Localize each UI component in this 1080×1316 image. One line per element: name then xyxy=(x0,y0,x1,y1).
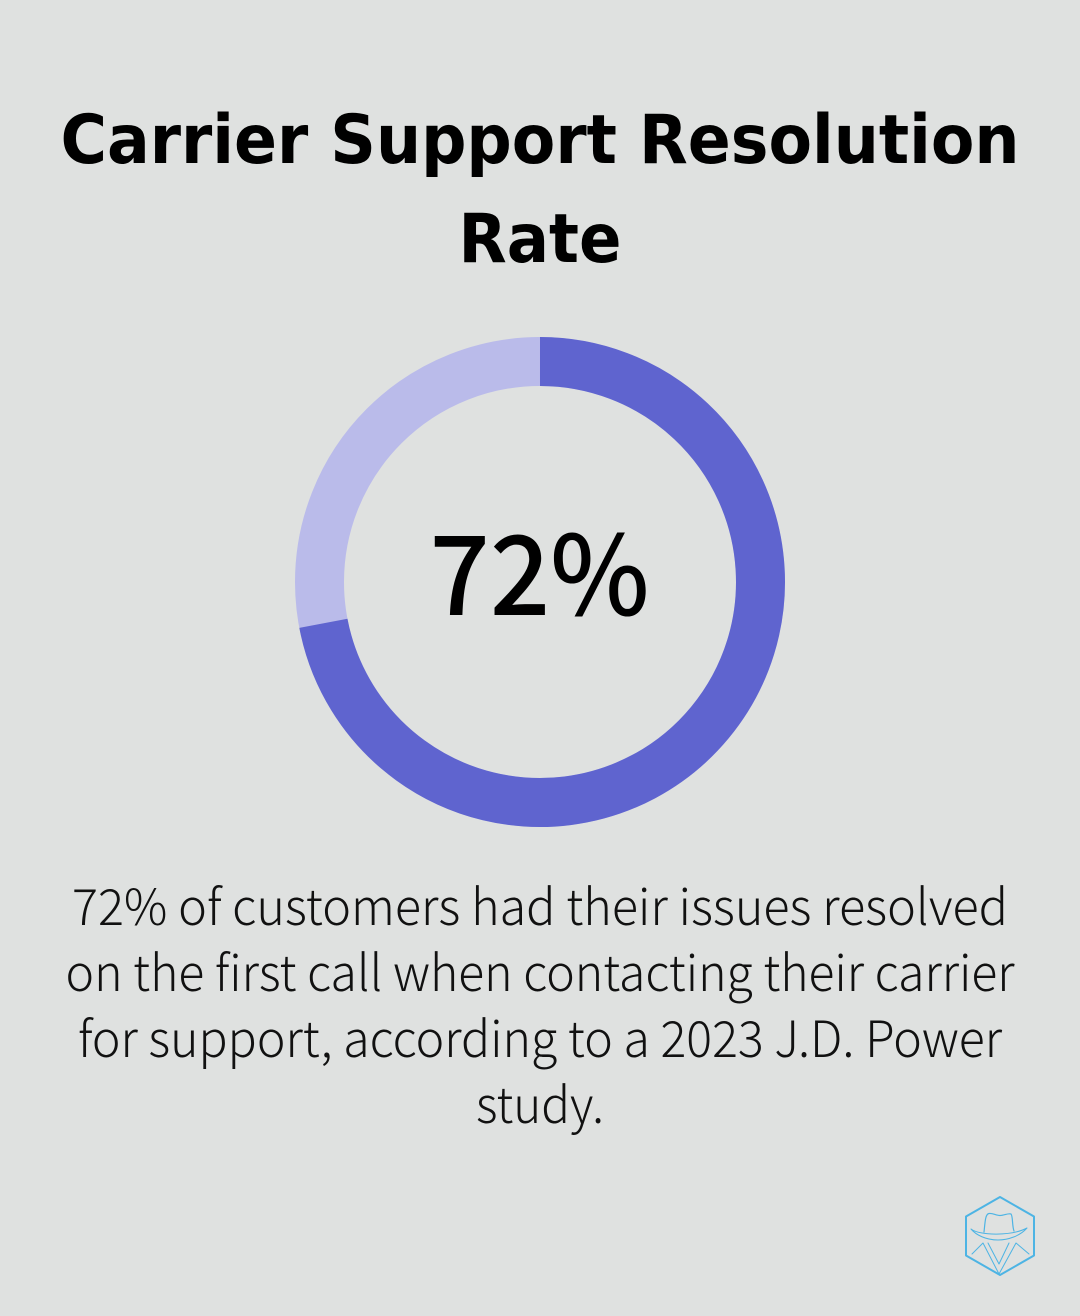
title: Carrier Support Resolution xyxy=(60,101,1020,180)
description text: study. xyxy=(476,1066,604,1138)
title xyxy=(60,101,1020,279)
description text: for support, according to a 2023 J.D. Power xyxy=(78,1000,1003,1072)
icon: spy hat logo xyxy=(966,1197,1034,1275)
description text xyxy=(66,868,1016,1138)
title: Rate xyxy=(458,200,622,279)
donut chart: 72% xyxy=(320,362,760,802)
description text: on the first call when contacting their carrier xyxy=(66,934,1016,1006)
donut value: 72% xyxy=(430,487,650,647)
description text: 72% of customers had their issues resolved xyxy=(72,868,1008,940)
